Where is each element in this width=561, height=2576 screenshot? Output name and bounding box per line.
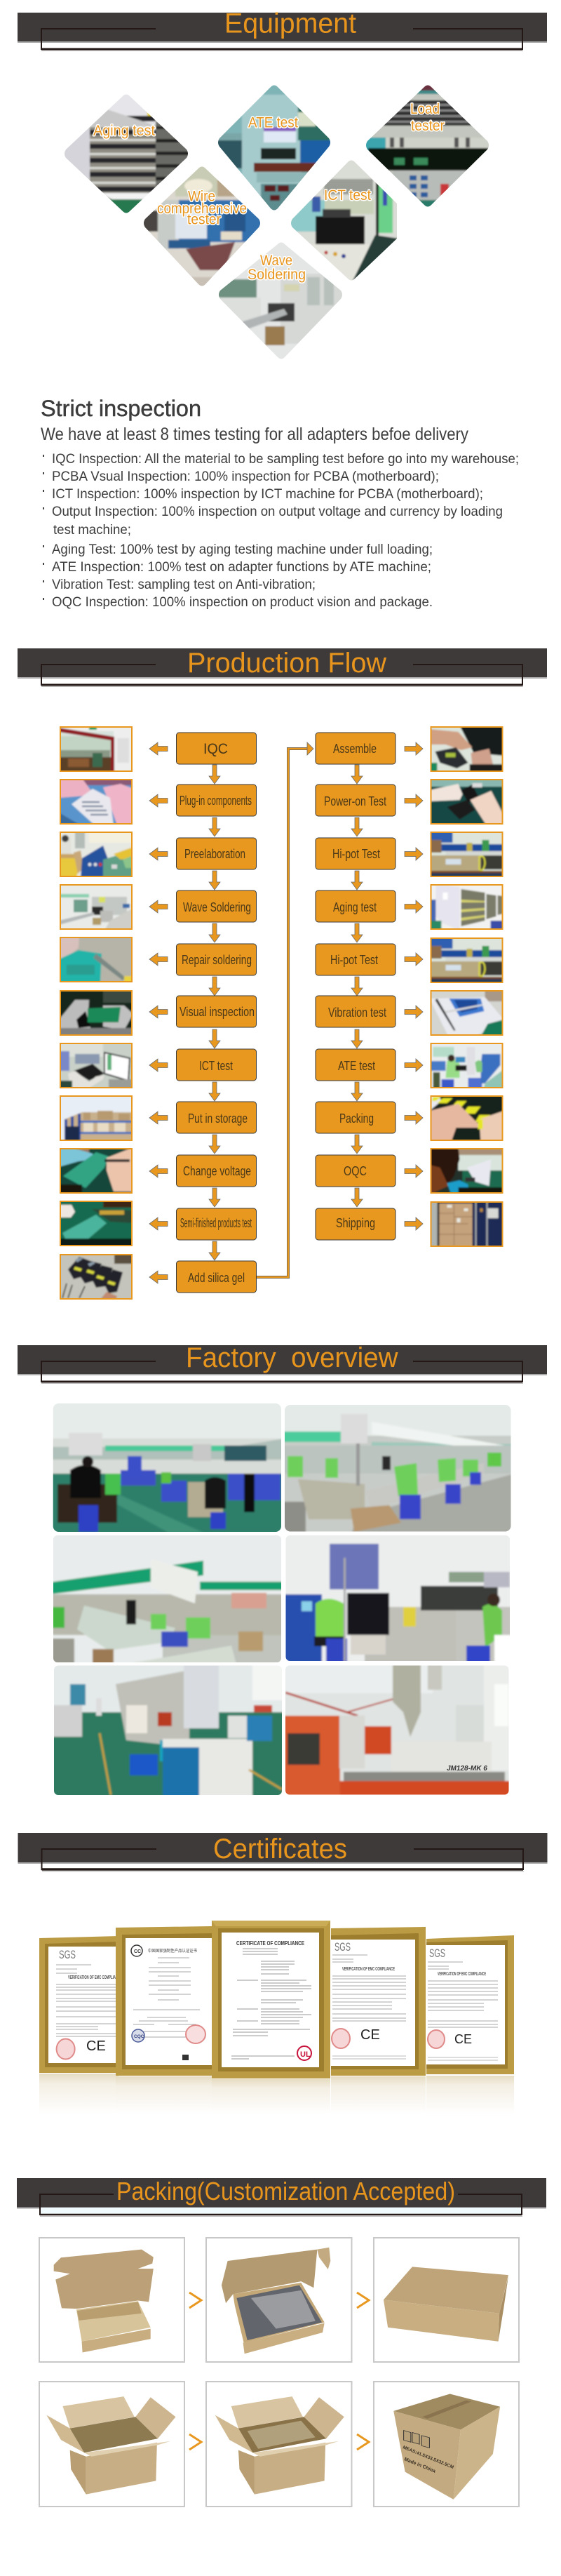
section header: Factory overview — [18, 1342, 547, 1384]
heading: Packing (Customization Accepted): Packing(Customization Accepted) — [116, 2177, 455, 2205]
photo: assembly line with blue bins — [49, 1400, 285, 1536]
label: ICT test: ICT test — [324, 187, 371, 203]
certificate: SGS left: CE — [86, 2038, 106, 2054]
arrow: hi-pot second to photo — [405, 953, 423, 966]
step: sealed carton: MEAS:41.5X33.5X32.5CM — [402, 2445, 454, 2470]
step: Repair soldering: Repair soldering — [182, 953, 252, 967]
step: Put in storage — [177, 1102, 257, 1133]
arrow: IQC to Plug-in components — [209, 765, 220, 784]
heading: Strict inspection: Strict inspection — [41, 396, 201, 421]
photo: semi-finished products test — [59, 1200, 133, 1247]
subheading: We have at least 8 times testing for all adapters befoe delivery — [41, 425, 468, 444]
photo: aging test — [429, 883, 503, 930]
section header: Equipment — [18, 8, 547, 51]
arrow: ATE test to Packing — [351, 1082, 363, 1101]
step: ICT test: ICT test — [199, 1059, 233, 1073]
photo: cable extrusion line — [50, 1662, 286, 1799]
step: closed small box — [374, 2238, 519, 2362]
arrow: preelaboration to photo — [149, 848, 168, 860]
step: sealed carton: Made in China — [403, 2457, 436, 2474]
arrow: chevron — [357, 2434, 369, 2450]
panel: framed certificates — [39, 1921, 514, 2114]
certificate: CCC: 中国国家强制性产品认证证书 — [148, 1948, 197, 1954]
photo: wire comprehensive tester — [144, 167, 260, 286]
arrow: aging to photo — [405, 900, 423, 913]
photo: vibration test — [429, 989, 503, 1036]
step: Packing: Packing — [339, 1112, 374, 1126]
step: Put in storage: Put in storage — [188, 1112, 248, 1126]
arrow: chevron — [189, 2434, 201, 2450]
step: Preelaboration — [177, 838, 257, 869]
section header: Certificates — [18, 1833, 547, 1872]
step: Power-on Test — [316, 785, 396, 816]
photo: power-on test — [429, 778, 503, 825]
panel: production flow chart: Semi-finished products test — [180, 1216, 252, 1230]
step: Add silica gel — [177, 1261, 257, 1293]
step: empty small box — [39, 2238, 184, 2362]
arrow: Hi-pot Test to Aging test — [351, 871, 363, 890]
step: Shipping: Shipping — [336, 1216, 375, 1230]
arrow: visual inspection to photo — [149, 1006, 168, 1018]
step: IQC: IQC — [203, 741, 228, 757]
panel: strict inspection — [41, 396, 519, 610]
label: Load tester — [410, 101, 445, 134]
arrow: OQC to Shipping — [351, 1188, 363, 1207]
photo: IQC — [59, 726, 133, 773]
photo: load tester — [366, 86, 489, 206]
photo: OQC — [429, 1147, 503, 1194]
arrow: power-on to photo — [405, 794, 423, 807]
certificate: SGS left: VERIFICATION OF EMC COMPLIA — [68, 1975, 116, 1980]
machine model label: JM128-MK 6 — [447, 1765, 487, 1773]
photo: add silica gel — [59, 1253, 133, 1300]
label: Load tester: tester — [411, 118, 445, 134]
step: Hi-pot Test (second) — [316, 944, 396, 975]
step: Wave Soldering: Wave Soldering — [183, 900, 251, 914]
certificate: SGS right one — [331, 1927, 426, 2076]
arrow: shipping to photo — [405, 1217, 423, 1230]
arrow: put in storage to photo — [149, 1112, 168, 1124]
label: Wave Soldering: Wave — [260, 253, 292, 269]
step: Hi-pot Test: Hi-pot Test — [332, 847, 380, 861]
step: Shipping — [316, 1208, 396, 1240]
step: Aging test: Aging test — [333, 900, 377, 914]
step: ICT test — [177, 1049, 257, 1081]
step: OQC: OQC — [344, 1164, 367, 1178]
arrow: Repair soldering to Visual inspection — [209, 977, 220, 996]
arrow: Preelaboration to Wave Soldering — [209, 871, 220, 890]
certificate: SGS right two: CE — [454, 2032, 472, 2046]
photo: hi-pot test — [429, 831, 503, 878]
photo: assembly line with whiteboard — [50, 1532, 285, 1667]
step: Change voltage — [177, 1155, 257, 1187]
photo: assemble — [429, 726, 503, 773]
inspection list: Output Inspection: 100% inspection on output voltage and currency by loading — [52, 504, 503, 519]
step: Wave Soldering — [177, 890, 257, 922]
label: Wave Soldering: Soldering — [248, 267, 306, 283]
photo: assembly line with green shirts — [281, 1401, 515, 1535]
step: IQC — [177, 733, 257, 764]
photo: ICT test — [291, 160, 397, 281]
arrow: Hi-pot Test to Vibration test — [351, 977, 363, 996]
certificate: SGS left: SGS — [59, 1948, 76, 1961]
photo: ATE test — [429, 1042, 503, 1089]
photo: wave soldering — [59, 883, 133, 930]
step: Vibration test — [316, 996, 396, 1027]
section header: Packing — [17, 2177, 546, 2217]
inspection list — [43, 451, 519, 610]
certificate: SGS right one: SGS — [334, 1940, 351, 1954]
arrow: repair soldering to photo — [149, 953, 168, 966]
arrow: chevron — [357, 2293, 369, 2308]
photo: repair soldering — [59, 936, 133, 983]
step: Hi-pot Test (second): Hi-pot Test — [330, 953, 378, 967]
arrow: assemble to photo — [405, 742, 423, 755]
inspection list: PCBA Vsual Inspection: 100% inspection for PCBA (motherboard); — [52, 469, 439, 484]
arrow: Power-on Test to Hi-pot Test — [351, 817, 363, 836]
inspection list: ICT Inspection: 100% inspection by ICT machine for PCBA (motherboard); — [52, 486, 483, 502]
certificate: CCC — [116, 1926, 212, 2076]
arrow: add silica gel to photo — [149, 1271, 168, 1283]
arrow: Visual inspection to ICT test — [209, 1029, 220, 1048]
step: Change voltage: Change voltage — [183, 1164, 251, 1178]
arrow: wave soldering to photo — [149, 900, 168, 913]
arrow: ICT test to Put in storage — [209, 1082, 220, 1101]
photo: ATE test — [218, 86, 330, 211]
arrow: ATE to photo — [405, 1059, 423, 1072]
arrow: Assemble to Power-on Test — [351, 765, 363, 784]
arrow: packing to photo — [405, 1112, 423, 1124]
step: Repair soldering — [177, 944, 257, 975]
photo: packing — [429, 1095, 503, 1142]
arrow: hi-pot to photo — [405, 848, 423, 860]
label: Wire comprehensive tester: tester — [187, 212, 221, 227]
arrow: semi-finished to photo — [149, 1217, 168, 1230]
photo: injection moulding machine — [282, 1662, 513, 1798]
inspection list: Vibration Test: sampling test on Anti-vibration; — [52, 577, 316, 592]
heading: Equipment: Equipment — [224, 8, 356, 39]
step: Packing — [316, 1102, 396, 1133]
arrow: change voltage to photo — [149, 1165, 168, 1177]
arrow: Semi-finished to Add silica gel — [209, 1241, 220, 1260]
panel: packing steps — [39, 2238, 519, 2507]
step: Vibration test: Vibration test — [328, 1006, 386, 1020]
photo: visual inspection — [59, 989, 133, 1036]
certificate: SGS right one: CE — [360, 2027, 380, 2043]
heading: Factory overview: Factory overview — [186, 1342, 398, 1373]
photo: plug-in components — [59, 778, 133, 825]
certificate: UL compliance centre: CERTIFICATE OF COMPLIANCE — [236, 1940, 305, 1947]
arrow: IQC to photo — [149, 742, 168, 755]
step: Assemble — [316, 733, 396, 764]
arrow: Packing to OQC — [351, 1135, 363, 1154]
panel: equipment diamond photos — [60, 81, 493, 363]
step: Assemble: Assemble — [333, 742, 377, 756]
label: Wire comprehensive tester: Wire — [188, 188, 215, 205]
label: ATE test: ATE test — [248, 115, 298, 131]
step: ATE test: ATE test — [338, 1059, 375, 1073]
step: Power-on Test: Power-on Test — [324, 794, 386, 808]
certificate: SGS right two — [426, 1935, 514, 2074]
photo: aging test — [65, 94, 188, 213]
step: empty carton — [39, 2382, 184, 2507]
inspection list: OQC Inspection: 100% inspection on product vision and package. — [52, 594, 433, 610]
arrow: Put in storage to Change voltage — [209, 1135, 220, 1154]
heading: Certificates: Certificates — [213, 1834, 347, 1864]
arrow: Aging test to Hi-pot Test — [351, 923, 363, 942]
certificate: SGS right two: SGS — [429, 1947, 445, 1960]
photo: wave soldering — [219, 243, 342, 359]
certificate: UL compliance centre — [212, 1921, 330, 2078]
step: Aging test — [316, 890, 396, 922]
heading: Production Flow: Production Flow — [187, 648, 386, 679]
step: sealed carton — [374, 2382, 519, 2507]
arrow: vibration to photo — [405, 1006, 423, 1018]
step: Add silica gel: Add silica gel — [188, 1271, 245, 1285]
step: OQC — [316, 1155, 396, 1187]
arrow: ICT test to photo — [149, 1059, 168, 1072]
step: box with bubble wrap — [206, 2238, 352, 2362]
certificate reflection — [39, 2074, 514, 2114]
panel: production flow chart — [59, 726, 503, 1300]
step: Plug-in components: Plug-in components — [180, 794, 252, 808]
arrow: OQC to photo — [405, 1165, 423, 1177]
inspection list: test machine; — [53, 522, 131, 538]
photo: wire rack workshop — [282, 1532, 513, 1665]
arrow: chevron — [189, 2293, 201, 2308]
label: Load tester: Load — [410, 101, 440, 117]
step: Plug-in components — [177, 785, 257, 816]
step: Semi-finished products test — [177, 1208, 257, 1240]
arrow: Plug-in to Preelaboration — [209, 817, 220, 836]
inspection list: ATE Inspection: 100% test on adapter functions by ATE machine; — [52, 559, 431, 575]
certificate: CCC: CC — [134, 1949, 141, 1954]
photo: shipping — [429, 1201, 503, 1248]
photo: put in storage — [59, 1095, 133, 1142]
step: Visual inspection: Visual inspection — [180, 1005, 255, 1019]
step: Visual inspection — [177, 996, 257, 1027]
label: Wire comprehensive tester — [157, 188, 247, 227]
step: Hi-pot Test — [316, 838, 396, 869]
photo: hi-pot test second — [429, 937, 503, 984]
label: Aging test: Aging test — [93, 123, 155, 139]
step: ATE test — [316, 1049, 396, 1081]
section header: Production Flow — [18, 648, 547, 687]
certificate: CCC: CQC — [134, 2034, 144, 2039]
photo: ICT test — [59, 1042, 133, 1089]
certificate: SGS right one: VERIFICATION OF EMC COMPLIANCE — [342, 1967, 395, 1972]
step: carton filled with products — [206, 2382, 352, 2507]
arrow: plug-in to photo — [149, 794, 168, 807]
inspection list: Aging Test: 100% test by aging testing machine under full loading; — [52, 542, 433, 557]
inspection list: IQC Inspection: All the material to be sampling test before go into my warehouse; — [52, 451, 519, 467]
certificate: SGS right two: VERIFICATION OF EMC COMPLIANCE — [438, 1972, 486, 1977]
flow connector from Add silica gel to Assemble — [256, 742, 313, 1277]
certificate: SGS left — [39, 1936, 119, 2073]
label: Wave Soldering — [248, 253, 306, 283]
step: Preelaboration: Preelaboration — [184, 847, 245, 861]
certificate: UL compliance centre: UL — [300, 2050, 311, 2059]
arrow: Vibration test to ATE test — [351, 1029, 363, 1048]
label: Wire comprehensive tester: comprehensive — [157, 201, 247, 217]
arrow: Change voltage to Semi-finished products test — [209, 1188, 220, 1207]
photo: preelaboration — [59, 831, 133, 878]
panel: factory photo grid — [49, 1400, 515, 1799]
arrow: Wave Soldering to Repair soldering — [209, 923, 220, 942]
photo: change voltage — [59, 1147, 133, 1194]
